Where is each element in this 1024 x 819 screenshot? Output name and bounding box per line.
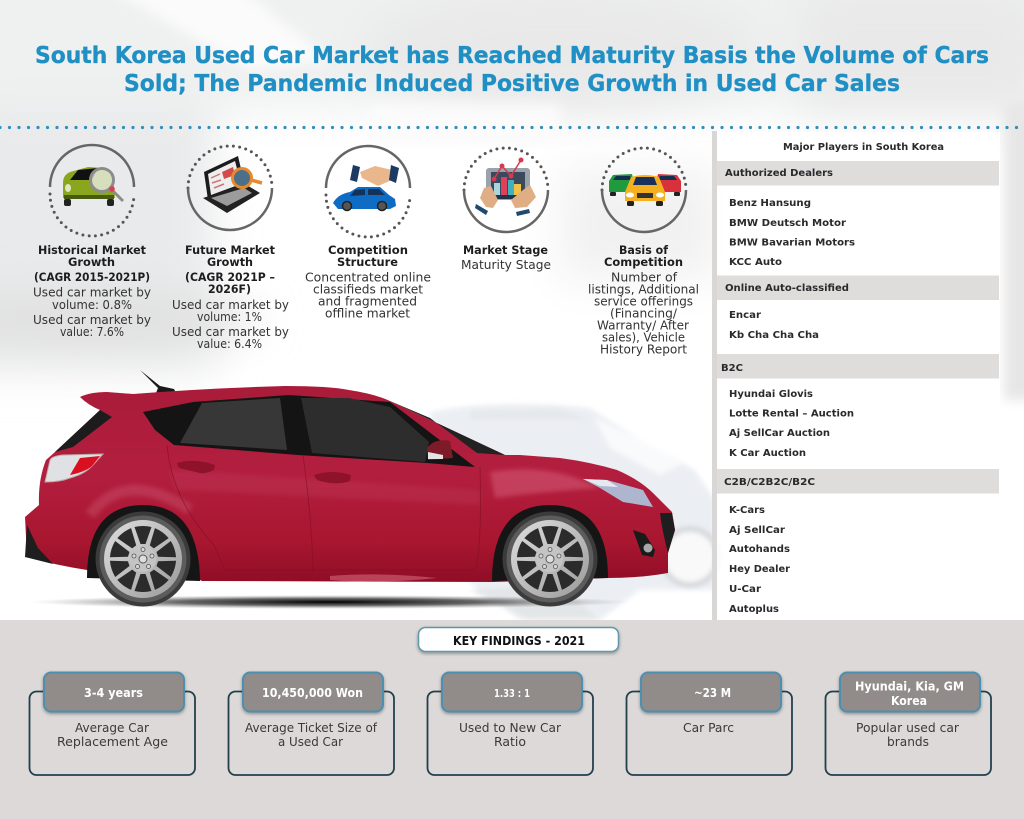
card: used to new ratio: Used to New Car	[459, 721, 561, 735]
card: ticket size: Average Ticket Size of	[245, 721, 378, 735]
text: competition description: Concentrated online	[305, 270, 431, 284]
heading: key findings 2021	[418, 628, 618, 652]
background: faded photograph	[0, 0, 1024, 620]
heading: future market growth	[185, 243, 275, 296]
heading: market stage: Market Stage	[463, 243, 548, 257]
section: authorized dealers: KCC Auto	[729, 257, 782, 268]
card: used to new ratio	[428, 672, 593, 775]
card: replacement age: Average Car	[75, 721, 149, 735]
text: future figures: volume: 1%	[197, 310, 262, 324]
text: basis description: Number of	[611, 270, 678, 284]
card: popular brands: Korea	[891, 694, 927, 708]
antenna	[140, 370, 176, 393]
section: authorized dealers: BMW Bavarian Motors	[729, 238, 855, 248]
heading: competition structure: Competition	[328, 243, 408, 257]
title	[35, 43, 989, 97]
text: basis description	[588, 270, 699, 356]
card: used to new ratio: 1.33 : 1	[494, 687, 530, 700]
text: basis description: Warranty/ After	[597, 318, 689, 332]
card: car parc: ~23 M	[694, 686, 731, 700]
section: B2C: Hyundai Glovis	[729, 389, 813, 400]
text: basis description: listings, Additional	[588, 282, 699, 296]
section: B2C	[717, 354, 999, 459]
text: competition description: and fragmented	[318, 294, 417, 308]
section: online auto-classified: Kb Cha Cha Cha	[729, 330, 819, 341]
panel: market stage	[461, 148, 551, 272]
fog lamp	[633, 530, 655, 557]
section: C2B/C2B2C/B2C: Autoplus	[729, 604, 779, 615]
text: historical figures: Used car market by	[33, 313, 151, 327]
text: competition description	[305, 270, 431, 320]
heading: basis of competition: Competition	[604, 255, 683, 269]
card: used to new ratio: Ratio	[494, 735, 526, 749]
text: basis description: History Report	[600, 342, 687, 356]
background: ghost blue car behind the red car	[430, 404, 718, 620]
icon: tablet with chart held in hands	[464, 148, 548, 232]
card: car parc: Car Parc	[683, 721, 734, 735]
section: online auto-classified: Online Auto-classified	[725, 283, 849, 294]
text: historical figures: volume: 0.8%	[52, 298, 132, 312]
text: future figures: Used car market by	[172, 325, 289, 339]
section: B2C: Lotte Rental – Auction	[729, 408, 854, 420]
car shadow	[30, 595, 630, 609]
heading: historical market growth: (CAGR 2015-2021P)	[34, 270, 150, 284]
text: future figures	[172, 298, 289, 351]
card: replacement age: 3-4 years	[84, 686, 143, 700]
section: B2C: K Car Auction	[729, 448, 806, 459]
heading: historical market growth: Growth	[68, 255, 115, 269]
heading: future market growth: 2026F)	[208, 282, 251, 296]
heading: competition structure: Structure	[337, 255, 398, 269]
panel: market overview column 2	[172, 146, 289, 351]
text: historical figures: Used car market by	[33, 286, 151, 300]
card: popular brands	[826, 672, 991, 775]
heading: basis of competition	[604, 243, 683, 269]
car body	[25, 386, 675, 582]
title: South Korea Used Car Market has Reached Maturity Basis the Volume of Cars	[35, 43, 989, 69]
section: C2B/C2B2C/B2C: Hey Dealer	[729, 564, 790, 575]
card: popular brands: brands	[887, 735, 929, 749]
panel: basis of competition	[588, 148, 699, 356]
text: competition description: offline market	[325, 306, 410, 320]
panel: market overview column 1	[33, 145, 151, 339]
section: C2B/C2B2C/B2C: U-Car	[729, 584, 761, 595]
section: B2C: Aj SellCar Auction	[729, 428, 830, 439]
text: maturity stage: Maturity Stage	[461, 258, 551, 272]
text: competition description: classifieds market	[313, 282, 423, 296]
heading: historical market growth	[34, 243, 150, 284]
panel: key findings	[0, 620, 1024, 819]
text: basis description: (Financing/	[610, 306, 678, 320]
card: replacement age: Replacement Age	[57, 735, 168, 749]
card: replacement age	[30, 672, 195, 775]
heading: major players: Major Players in South Korea	[783, 142, 944, 153]
card: ticket size: 10,450,000 Won	[262, 686, 363, 700]
icon: handshake and blue car	[326, 146, 410, 237]
title: Sold; The Pandemic Induced Positive Growth in Used Car Sales	[124, 71, 900, 97]
heading: future market growth: (CAGR 2021P –	[185, 270, 275, 284]
text: future figures: value: 6.4%	[197, 337, 262, 351]
section: B2C: B2C	[721, 363, 743, 374]
illustration: red hatchback	[25, 370, 675, 609]
front wheel	[492, 505, 608, 606]
card: ticket size	[228, 672, 394, 775]
card: popular brands: Hyundai, Kia, GM	[855, 680, 964, 694]
section: authorized dealers	[717, 161, 999, 268]
heading: future market growth: Future Market	[185, 243, 275, 257]
text: future figures: Used car market by	[172, 298, 289, 312]
section: authorized dealers: Authorized Dealers	[725, 168, 833, 179]
text: historical figures	[33, 286, 151, 339]
icon: laptop with magnifier	[188, 146, 272, 230]
windows	[143, 395, 475, 467]
icon: green car with magnifier	[50, 145, 134, 236]
section: online auto-classified: Encar	[729, 310, 761, 321]
section: online auto-classified	[717, 276, 999, 341]
headlight	[583, 479, 653, 507]
card: popular brands: Popular used car	[856, 721, 959, 735]
section: C2B/C2B2C/B2C: Autohands	[729, 544, 790, 555]
heading: historical market growth: Historical Market	[38, 243, 146, 257]
heading: future market growth: Growth	[207, 255, 253, 269]
section: C2B/C2B2C/B2C: Aj SellCar	[729, 525, 785, 536]
heading: basis of competition: Basis of	[619, 243, 669, 257]
section: C2B/C2B2C/B2C: C2B/C2B2C/B2C	[724, 477, 815, 488]
heading: competition structure	[328, 243, 408, 269]
rear wheel	[87, 505, 200, 606]
card: car parc	[626, 672, 792, 775]
tail light	[45, 454, 103, 482]
side mirror	[427, 440, 453, 460]
panel: major players in South Korea	[712, 131, 1000, 620]
section: C2B/C2B2C/B2C	[717, 469, 999, 615]
section: authorized dealers: BMW Deutsch Motor	[729, 218, 846, 229]
text: basis description: service offerings	[594, 294, 693, 308]
panel: competition structure	[305, 146, 431, 320]
heading: key findings 2021: KEY FINDINGS - 2021	[453, 633, 585, 648]
section: C2B/C2B2C/B2C: K-Cars	[729, 505, 765, 516]
text: historical figures: value: 7.6%	[60, 325, 124, 339]
text: basis description: sales), Vehicle	[602, 330, 685, 344]
section: authorized dealers: Benz Hansung	[729, 198, 811, 209]
door lines and handles	[167, 445, 480, 572]
icon: three cars	[602, 148, 686, 232]
card: ticket size: a Used Car	[278, 735, 343, 749]
